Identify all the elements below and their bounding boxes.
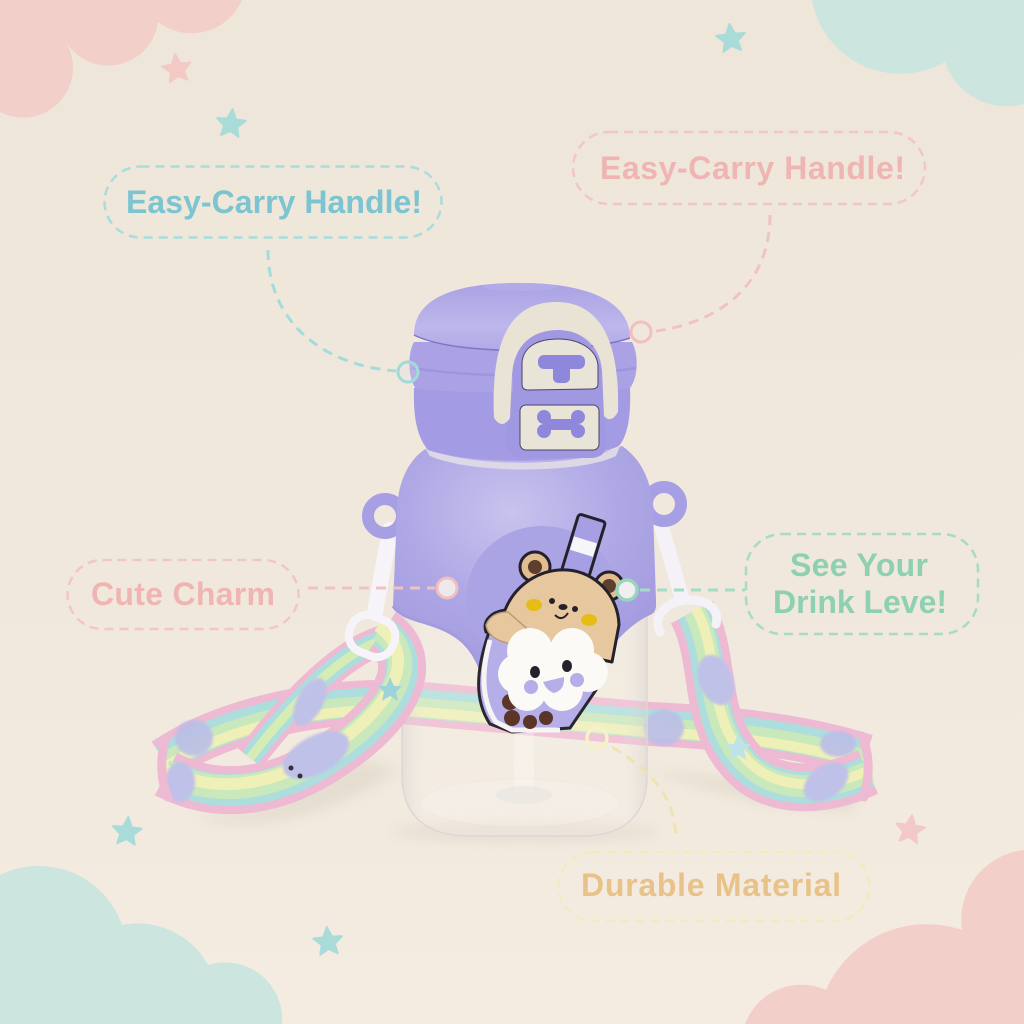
star: mint lower left — [112, 816, 143, 845]
cap shadow line — [414, 335, 630, 350]
fish prints on right strap — [691, 650, 856, 809]
strap: back band behind bottle — [164, 702, 866, 768]
T icon — [538, 355, 585, 383]
right fold edge — [862, 736, 868, 797]
star: mint top right — [715, 23, 746, 52]
marker: pink — [631, 322, 651, 342]
strap: fish prints on back band — [175, 710, 856, 757]
cloud eyes — [530, 660, 572, 678]
charm — [479, 514, 623, 732]
cloud cheeks and mouth — [524, 673, 584, 694]
bear cheeks — [526, 599, 597, 626]
boba pearls — [502, 694, 553, 729]
white cloud — [498, 628, 608, 711]
bottle clear body — [402, 600, 647, 836]
cloud: top left — [0, 0, 242, 118]
star: mint bottom — [312, 926, 343, 955]
inner straw — [514, 725, 534, 793]
ring ridge — [411, 368, 636, 376]
lower collar — [414, 388, 630, 461]
left fold edge — [162, 738, 168, 797]
cloud: bottom right — [745, 850, 1024, 1024]
bear ears — [520, 552, 550, 582]
connector: blue — [268, 250, 396, 371]
latch purple base — [505, 330, 606, 458]
connector: green — [640, 588, 745, 592]
bear mouth — [555, 613, 568, 618]
bottle purple shoulder — [393, 446, 656, 668]
marker: cream — [587, 728, 607, 748]
callout: easy-carry handle blue — [104, 166, 442, 238]
star on left strap — [378, 677, 402, 701]
ring — [409, 342, 637, 393]
bear face — [549, 598, 578, 612]
lid clear ring — [425, 446, 620, 470]
fish eyes left — [288, 766, 302, 778]
straw foot — [496, 786, 552, 804]
star: mint top left — [216, 108, 247, 137]
connector: cream — [612, 747, 676, 838]
loop: right side — [647, 487, 681, 521]
strap: front band right — [692, 609, 872, 787]
callout: easy-carry handle pink — [573, 132, 925, 204]
bottle base — [420, 779, 620, 827]
lower rim of sleeve — [393, 606, 480, 668]
ground shadows — [190, 760, 860, 841]
medallion disc — [466, 526, 618, 670]
callout: cute charm: Cute Charm — [91, 576, 275, 612]
callout: easy-carry handle blue: Easy-Carry Handle! — [126, 184, 422, 220]
callout: easy-carry handle pink: Easy-Carry Handle! — [600, 150, 905, 186]
cup outline — [479, 632, 600, 732]
callout: durable material — [558, 852, 870, 921]
callout: cute charm — [68, 560, 298, 629]
straw — [561, 514, 606, 581]
star: pink lower right — [894, 813, 926, 844]
carabiner: right — [658, 522, 717, 632]
loop: left side — [368, 499, 402, 533]
latch group — [494, 302, 618, 458]
cup white rim — [484, 640, 560, 730]
cloud: bottom left — [0, 866, 282, 1024]
carabiner: left — [344, 530, 400, 662]
lower cream button — [520, 405, 599, 450]
bone icon — [537, 410, 585, 438]
callout: see your drink level — [746, 534, 978, 634]
marker: blue — [398, 362, 418, 382]
strap: inner twist left — [250, 640, 384, 758]
strap: front band left — [162, 626, 402, 790]
star: pink top — [161, 52, 193, 83]
callout: see your drink level: See Your — [790, 547, 928, 583]
cap top button — [482, 283, 558, 291]
connector: pink — [656, 215, 770, 331]
callout: see your drink level: Drink Leve! — [773, 584, 947, 620]
fish prints on left strap — [165, 721, 357, 802]
bear head — [485, 570, 619, 662]
callout: durable material: Durable Material — [581, 867, 841, 903]
cloud: top right — [812, 0, 1024, 106]
fish print on inner twist — [286, 673, 334, 731]
star on right strap — [725, 734, 751, 760]
upper cream button — [522, 339, 598, 390]
connector: cute charm — [308, 586, 435, 590]
lid cap — [414, 283, 630, 350]
bear paw — [486, 612, 540, 646]
cream arch handle — [494, 302, 618, 424]
marker: green — [617, 580, 637, 600]
marker: cute charm — [437, 578, 457, 598]
